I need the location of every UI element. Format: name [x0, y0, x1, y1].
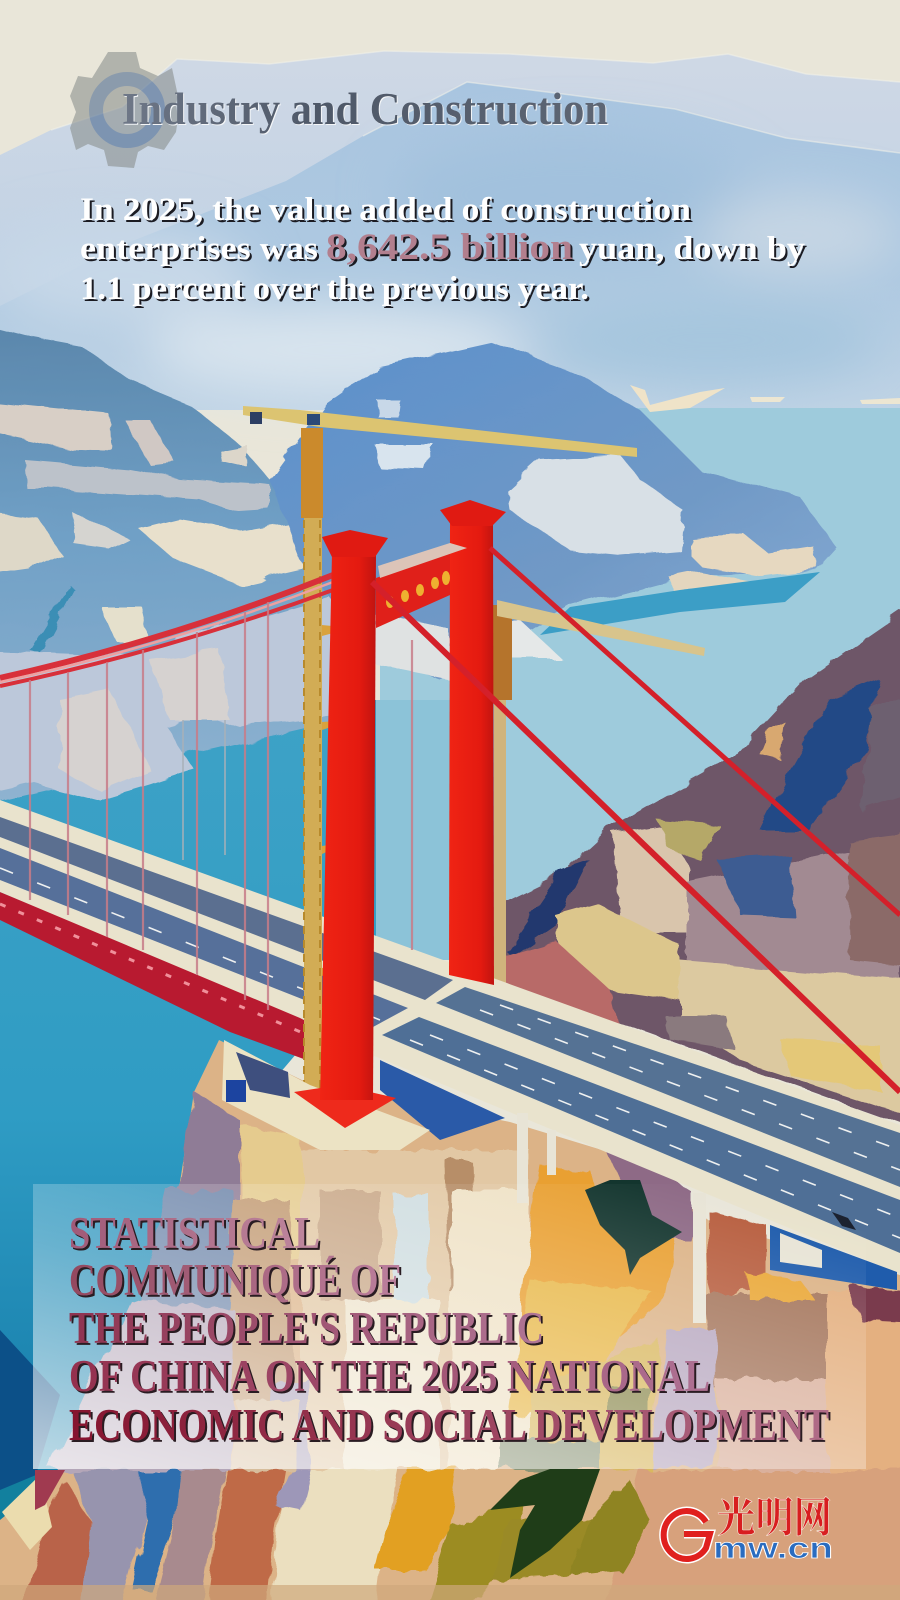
- red truss under deck: [0, 892, 320, 1065]
- intro text block: 1.1 percent over the previous year.: [80, 271, 589, 307]
- middle mountain range: [0, 82, 900, 410]
- left mountain body: [0, 318, 345, 800]
- intro text block: 8,642.5 billion: [326, 227, 573, 268]
- cliff strokes below panel: [20, 1470, 900, 1600]
- main cables right: [372, 548, 900, 1092]
- far mountain range: [0, 51, 900, 410]
- cream cliff bands: [0, 400, 112, 450]
- report title heading: COMMUNIQUÉ OF: [69, 1255, 401, 1305]
- translucent white panel: [33, 1184, 866, 1469]
- cream cliff shard: [2, 1475, 52, 1550]
- dark green brush marks lower: [490, 1469, 600, 1578]
- logo: Guangming Online: [664, 1485, 833, 1565]
- left red tower: [320, 530, 388, 1100]
- suspension bridge: [0, 406, 900, 1323]
- intro text block: [80, 192, 806, 307]
- center mountain body: [270, 342, 837, 680]
- pale cliffs: [507, 455, 683, 555]
- mountain base: [500, 600, 900, 1130]
- ridge highlights: [51, 51, 900, 153]
- logo: Guangming Online: mw.cn: [713, 1532, 833, 1565]
- right brown mountain group: [500, 600, 900, 1130]
- right red tower: [440, 500, 506, 985]
- report title heading: [69, 1208, 829, 1450]
- first crane mast and jib: [243, 406, 637, 1098]
- second crane mast and jib: [493, 600, 705, 985]
- intro text block: enterprises was: [80, 231, 318, 267]
- blue bay: [540, 572, 820, 635]
- dark green brush marks upper: [585, 1180, 682, 1275]
- left mountain group: [0, 318, 345, 800]
- intro text block: yuan, down by: [579, 231, 806, 267]
- report title heading: THE PEOPLE'S REPUBLIC: [69, 1303, 544, 1353]
- bottom sand strip: [0, 1585, 900, 1600]
- lower water: [0, 700, 376, 1530]
- crossbeam with gold banner marks: [376, 543, 467, 628]
- logo: Guangming Online: 光明网: [717, 1485, 832, 1545]
- misty lower slopes: [0, 590, 345, 800]
- upper right water: [380, 408, 900, 960]
- intro text block: In 2025, the value added of construction: [80, 192, 691, 228]
- teal streak: [30, 585, 75, 655]
- icon: gear: [70, 52, 178, 168]
- bridge piers: [380, 1060, 897, 1323]
- center mountain group: [270, 342, 837, 680]
- title: Industry and Construction: [122, 84, 608, 134]
- haze clouds: [0, 135, 900, 395]
- report title heading: STATISTICAL: [69, 1208, 320, 1258]
- main cliff: [0, 1040, 900, 1600]
- report title heading: OF CHINA ON THE 2025 NATIONAL: [69, 1351, 710, 1401]
- cliff strokes inside panel: [50, 1092, 900, 1480]
- bridge deck: [0, 800, 900, 1274]
- left main cable and hangers: [0, 575, 412, 1010]
- dark red brush: [35, 1470, 65, 1510]
- left tower base platform: [222, 1040, 430, 1150]
